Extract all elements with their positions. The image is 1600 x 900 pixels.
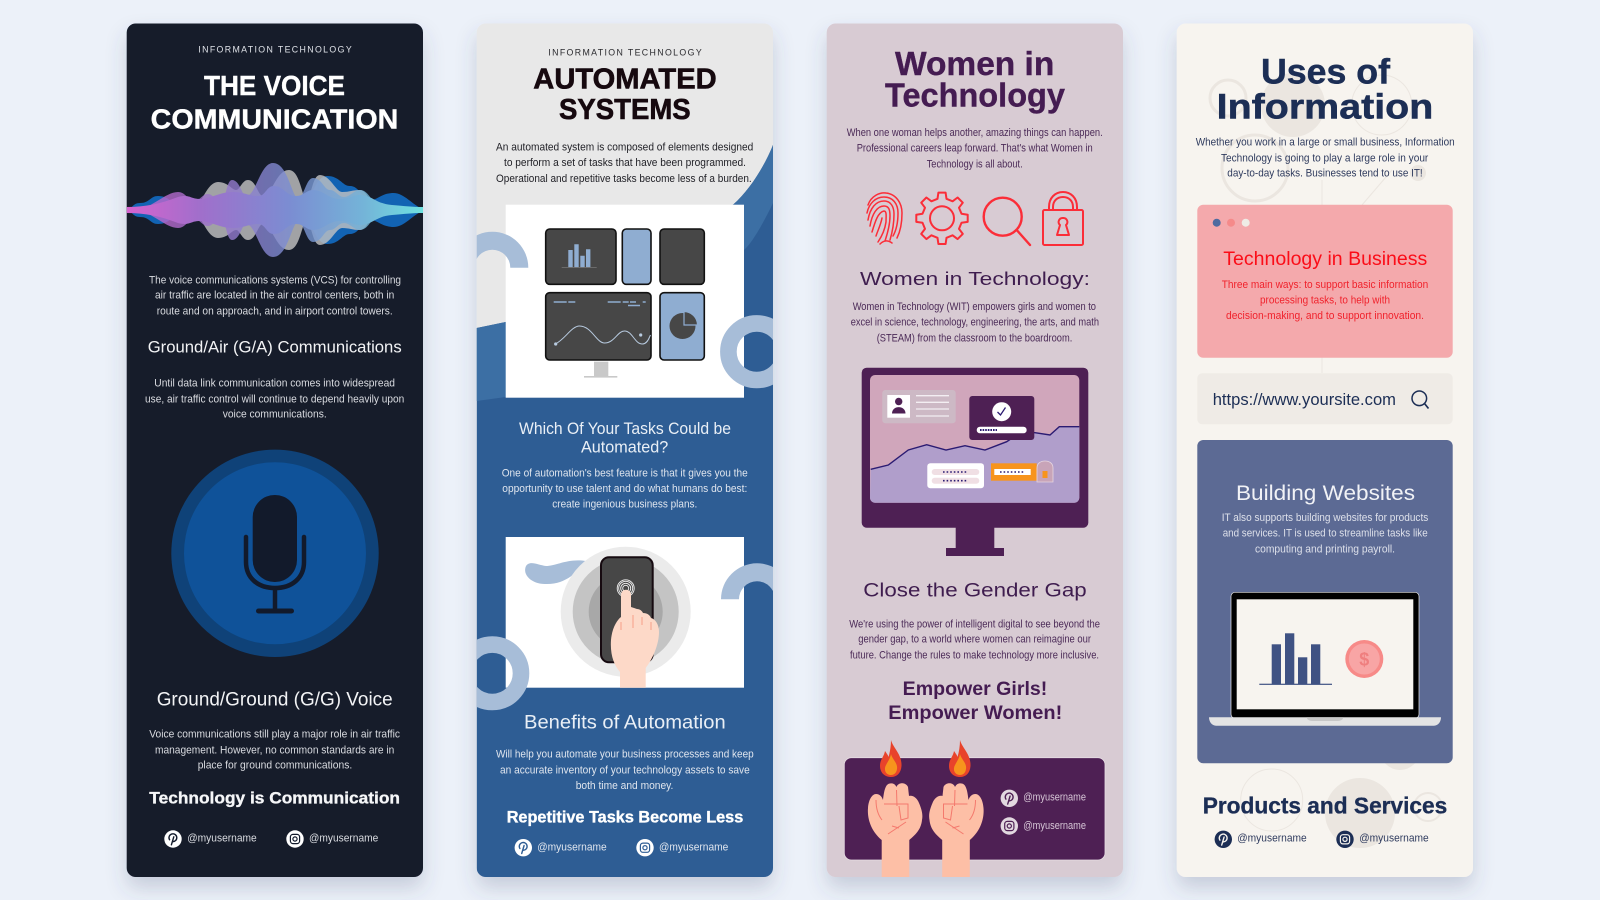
- ground ground text: Voice communications still play a major role in air traffic: [149, 729, 401, 741]
- card heading: Building Websites: [1236, 482, 1415, 505]
- password card: [927, 463, 984, 488]
- eyebrow label: INFORMATION TECHNOLOGY: [548, 48, 702, 58]
- social handles: [1215, 831, 1429, 848]
- intro text: route and on approach, and in airport control towers.: [157, 305, 393, 317]
- title: Uses of: [1261, 52, 1390, 91]
- heading: which tasks: Automated?: [581, 438, 668, 457]
- icon row: [867, 192, 1083, 245]
- tasks text: One of automation's best feature is that it gives you the: [502, 468, 748, 480]
- icon: microphone badge: [171, 450, 379, 657]
- sound wave: [127, 163, 423, 257]
- decorative ring lower: [464, 645, 521, 702]
- intro text: [149, 274, 401, 317]
- card heading: Technology in Business: [1223, 249, 1427, 270]
- search bar: https://www.yoursite.com: [1213, 390, 1396, 409]
- benefits text: both time and money.: [576, 780, 673, 792]
- title: AUTOMATED: [533, 63, 717, 95]
- icon: padlock: [1043, 192, 1083, 245]
- heading: which tasks: Which Of Your Tasks Could be: [519, 419, 731, 438]
- title: [1217, 52, 1433, 126]
- closing headline: Technology is Communication: [149, 788, 400, 807]
- decorative circles: [1210, 73, 1442, 848]
- intro text: Professional careers leap forward. That's what Women in: [857, 143, 1093, 155]
- intro text: [847, 127, 1103, 170]
- card text: [1222, 279, 1428, 322]
- blue background shapes: [477, 145, 773, 877]
- title: THE VOICE: [204, 70, 345, 101]
- card text: Three main ways: to support basic information: [1222, 279, 1428, 291]
- icon: fingerprint: [867, 193, 902, 244]
- intro text: [1196, 137, 1455, 180]
- intro text: An automated system is composed of elements designed: [496, 142, 753, 154]
- card text: IT also supports building websites for products: [1222, 512, 1428, 524]
- ground air text: Until data link communication comes into widespread: [154, 378, 395, 390]
- slogan: Empower Women!: [888, 702, 1062, 724]
- intro text: air traffic are located in the air control centers, both in: [155, 290, 394, 302]
- closing headline: Repetitive Tasks Become Less: [507, 809, 743, 827]
- intro text: When one woman helps another, amazing things can happen.: [847, 127, 1103, 139]
- tasks text: [502, 468, 748, 511]
- heading: which tasks: [519, 419, 731, 457]
- intro text: to perform a set of tasks that have been programmed.: [504, 157, 746, 169]
- gender gap text: future. Change the rules to make technology more inclusive.: [850, 649, 1099, 661]
- intro text: The voice communications systems (VCS) for controlling: [149, 274, 401, 286]
- icon: magnifier: [984, 198, 1030, 245]
- card text: computing and printing payroll.: [1255, 543, 1395, 555]
- laptop illustration: [1209, 592, 1441, 726]
- social handles: @myusername: [1237, 833, 1307, 845]
- wit text: excel in science, technology, engineering, the arts, and math: [851, 317, 1099, 329]
- intro text: Whether you work in a large or small business, Information: [1196, 137, 1455, 149]
- fingerprint phone illustration: [506, 537, 744, 688]
- panel: women in technology: [827, 24, 1123, 880]
- gender gap text: We're using the power of intelligent digital to see beyond the: [849, 618, 1100, 630]
- title: Technology: [885, 76, 1066, 114]
- title: COMMUNICATION: [151, 103, 398, 134]
- panel: automated systems: [456, 24, 793, 877]
- closing headline: Products and Services: [1203, 792, 1447, 818]
- card: building websites: [1197, 440, 1453, 763]
- icon: flames: [880, 740, 971, 777]
- ground ground text: place for ground communications.: [198, 760, 352, 772]
- icon: raised fists: [868, 783, 984, 880]
- ground air text: [145, 378, 404, 421]
- card text: decision-making, and to support innovation.: [1226, 310, 1424, 322]
- login card: [969, 396, 1034, 440]
- wit text: Women in Technology (WIT) empowers girls and women to: [853, 301, 1096, 313]
- title: Information: [1217, 87, 1433, 126]
- intro text: Operational and repetitive tasks become less of a burden.: [496, 173, 752, 185]
- heading: benefits: Benefits of Automation: [524, 711, 726, 733]
- ground air text: voice communications.: [223, 409, 327, 421]
- ground ground text: management. However, no common standards are in: [155, 744, 394, 756]
- title: [151, 70, 398, 134]
- ground ground text: [149, 729, 401, 772]
- slogan: Empower Girls!: [903, 678, 1047, 700]
- decorative half ring lower: [721, 563, 773, 600]
- panel: the voice communication: [127, 24, 423, 877]
- orange field with lock: [991, 461, 1053, 482]
- slogan: [888, 678, 1062, 724]
- social handles: @myusername: [1023, 792, 1086, 804]
- card text: and services. IT is used to streamline tasks like: [1223, 528, 1428, 540]
- benefits text: [496, 749, 754, 792]
- tasks text: opportunity to use talent and do what humans do best:: [502, 483, 747, 495]
- heading: ground ground: Ground/Ground (G/G) Voice: [157, 690, 393, 711]
- social handles: [1001, 790, 1086, 835]
- benefits text: an accurate inventory of your technology assets to save: [500, 764, 750, 776]
- bar chart: [1259, 633, 1332, 685]
- social handles: @myusername: [187, 832, 257, 844]
- area chart: [870, 427, 1079, 503]
- monitor illustration: [862, 368, 1088, 556]
- icon: gear: [916, 193, 968, 244]
- card text: [1222, 512, 1428, 555]
- intro text: day-to-day tasks. Businesses tend to use IT!: [1227, 168, 1423, 180]
- dark footer panel: [844, 740, 1105, 880]
- card: technology in business: [1197, 205, 1453, 358]
- heading: gender gap: Close the Gender Gap: [863, 581, 1087, 602]
- gender gap text: gender gap, to a world where women can reimagine our: [858, 634, 1091, 646]
- social handles: @myusername: [309, 832, 378, 844]
- intro text: Technology is all about.: [927, 158, 1023, 170]
- panel: uses of information: [1177, 24, 1473, 877]
- ground air text: use, air traffic control will continue to depend heavily upon: [145, 393, 404, 405]
- title: [885, 45, 1066, 114]
- heading: women in technology: Women in Technology:: [860, 269, 1090, 289]
- decorative ring: [728, 323, 785, 380]
- eyebrow label: INFORMATION TECHNOLOGY: [198, 44, 352, 54]
- card text: processing tasks, to help with: [1260, 295, 1390, 307]
- intro text: Technology is going to play a large role in your: [1221, 152, 1429, 164]
- icon: dollar coin: [1345, 640, 1383, 678]
- title: Women in: [895, 45, 1054, 82]
- heading: ground air: Ground/Air (G/A) Communications: [148, 338, 402, 357]
- search bar: [1197, 373, 1453, 424]
- gender gap text: [849, 618, 1100, 661]
- decorative half ring: [476, 232, 528, 268]
- wit text: (STEAM) from the classroom to the boardroom.: [877, 332, 1072, 344]
- title: SYSTEMS: [559, 94, 691, 126]
- social handles: @myusername: [1023, 820, 1086, 832]
- social handles: @myusername: [1359, 833, 1429, 845]
- title: [533, 63, 717, 126]
- social handles: [164, 830, 378, 848]
- wit text: [851, 301, 1099, 344]
- social handles: @myusername: [537, 842, 607, 854]
- intro text: [496, 142, 753, 185]
- dashboard illustration: [506, 205, 744, 398]
- social handles: [515, 839, 728, 856]
- window dots: [1213, 219, 1250, 227]
- tasks text: create ingenious business plans.: [552, 499, 697, 511]
- benefits text: Will help you automate your business processes and keep: [496, 749, 754, 761]
- profile card: [882, 390, 956, 423]
- icon: dollar coin: $: [1359, 650, 1369, 670]
- social handles: @myusername: [659, 842, 728, 854]
